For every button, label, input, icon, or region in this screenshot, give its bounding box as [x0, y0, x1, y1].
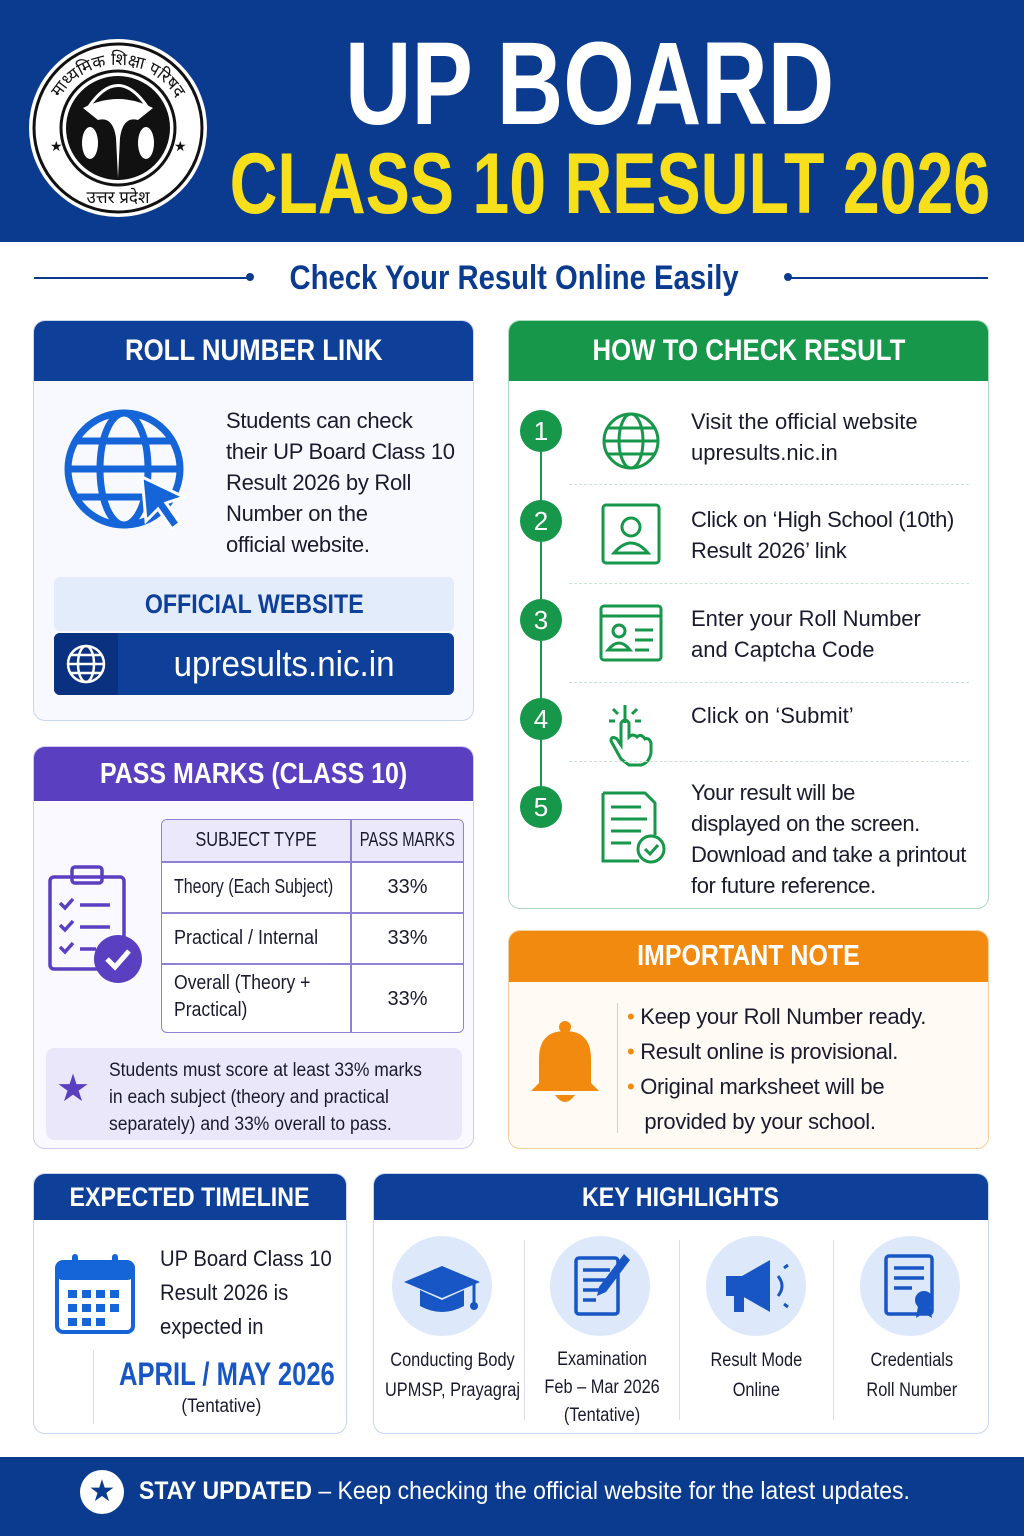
step 3: 3: [534, 605, 548, 635]
highlight: result mode: Online: [733, 1380, 780, 1401]
note list: • Result online is provisional.: [627, 1039, 898, 1064]
step 4: Click on ‘Submit’: [691, 703, 854, 728]
step 1: 1: [534, 416, 548, 446]
tagline: [34, 259, 988, 297]
table: [161, 819, 464, 1033]
icon: calendar: [55, 1254, 135, 1334]
logo: ★: [50, 138, 63, 154]
icon: checklist: [48, 865, 142, 983]
highlight: credentials: [860, 1236, 960, 1401]
step 1: [520, 409, 918, 470]
table: Practical / Internal: [174, 927, 318, 949]
title: UP BOARD: [345, 18, 835, 150]
text: timeline: UP Board Class 10: [160, 1246, 332, 1271]
url bar: [54, 633, 454, 695]
callout: note: in each subject (theory and practical: [109, 1087, 389, 1108]
label: official website: OFFICIAL WEBSITE: [145, 589, 363, 619]
panel: expected timeline: (Tentative): [181, 1396, 261, 1417]
panel: expected timeline: [33, 1173, 347, 1434]
text: description: [226, 408, 455, 557]
step 5: 5: [534, 792, 548, 822]
highlight: examination: (Tentative): [564, 1405, 641, 1426]
text: description: their UP Board Class 10: [226, 439, 455, 464]
logo: [29, 39, 207, 217]
note list: [627, 1004, 926, 1134]
panel: how to check: [508, 320, 989, 909]
logo: उत्तर प्रदेश: [86, 187, 150, 207]
note list: • Original marksheet will be: [627, 1074, 884, 1099]
panel: pass marks: [33, 746, 474, 1149]
table: 33%: [387, 988, 428, 1010]
step 3: Enter your Roll Number: [691, 606, 921, 631]
panel: roll number link: ROLL NUMBER LINK: [125, 334, 382, 367]
highlight: examination: Feb – Mar 2026: [545, 1377, 660, 1398]
panel: how to check: HOW TO CHECK RESULT: [592, 334, 905, 367]
panel: pass marks: PASS MARKS (CLASS 10): [100, 758, 407, 790]
text: timeline: expected in: [160, 1314, 264, 1339]
subtitle title: CLASS 10 RESULT 2026: [230, 136, 990, 232]
table: Overall (Theory +: [174, 972, 310, 994]
step 5: Your result will be: [691, 780, 855, 805]
step 1: upresults.nic.in: [691, 440, 838, 465]
callout: note: Students must score at least 33% marks: [109, 1060, 422, 1081]
step 3: and Captcha Code: [691, 637, 874, 662]
panel: important note: IMPORTANT NOTE: [637, 940, 860, 972]
logo: ★: [174, 138, 187, 154]
highlight: examination: [545, 1236, 660, 1426]
step 2: 2: [534, 506, 548, 536]
callout: note: [46, 1048, 462, 1140]
highlight: credentials: Credentials: [871, 1350, 953, 1371]
header banner: [0, 0, 1024, 242]
step 1: Visit the official website: [691, 409, 918, 434]
step 5: [520, 780, 966, 898]
icon: star badge: [80, 1470, 124, 1514]
footer text: STAY UPDATED – Keep checking the official website for the latest updates.: [139, 1477, 910, 1505]
panel: key highlights: [373, 1173, 989, 1434]
step 2: Click on ‘High School (10th): [691, 507, 954, 532]
table: 33%: [387, 927, 428, 949]
step 5: displayed on the screen.: [691, 811, 920, 836]
panel: key highlights: KEY HIGHLIGHTS: [583, 1182, 779, 1212]
table: Theory (Each Subject): [174, 876, 333, 898]
highlight: conducting body: [385, 1236, 520, 1401]
table: SUBJECT TYPE: [195, 829, 317, 851]
text: description: Students can check: [226, 408, 413, 433]
date: APRIL / MAY 2026: [119, 1356, 335, 1392]
note list: • Keep your Roll Number ready.: [627, 1004, 926, 1029]
callout: note: ★: [56, 1068, 90, 1110]
highlight: conducting body: UPMSP, Prayagraj: [385, 1380, 520, 1401]
text: timeline: Result 2026 is: [160, 1280, 288, 1305]
tagline: Check Your Result Online Easily: [289, 259, 739, 297]
step 5: for future reference.: [691, 873, 876, 898]
label: official website: [54, 577, 454, 631]
highlight: examination: Examination: [558, 1349, 647, 1370]
footer: [0, 1457, 1024, 1536]
text: timeline: [160, 1246, 332, 1339]
callout: note: separately) and 33% overall to pass.: [109, 1114, 392, 1135]
url bar: upresults.nic.in: [174, 643, 394, 684]
panel: expected timeline: EXPECTED TIMELINE: [70, 1182, 310, 1212]
text: description: official website.: [226, 532, 370, 557]
table: Practical): [174, 999, 247, 1021]
step 5: Download and take a printout: [691, 842, 966, 867]
panel: important note: [508, 930, 989, 1149]
step 4: 4: [534, 704, 548, 734]
text: description: Number on the: [226, 501, 368, 526]
logo: माध्यमिक शिक्षा परिषद: [50, 50, 186, 98]
step 2: [520, 500, 954, 564]
panel: roll number link: [33, 320, 474, 721]
step 3: [520, 599, 921, 662]
highlight: conducting body: Conducting Body: [390, 1350, 515, 1371]
highlight: credentials: Roll Number: [867, 1380, 957, 1401]
table: PASS MARKS: [359, 829, 455, 851]
icon: star badge: ★: [89, 1475, 115, 1508]
icon: globe cursor: [64, 410, 184, 528]
table: 33%: [387, 876, 428, 898]
highlight: result mode: [706, 1236, 806, 1401]
step 4: [520, 698, 854, 766]
highlight: result mode: Result Mode: [711, 1350, 802, 1371]
note list: provided by your school.: [644, 1109, 876, 1134]
step 2: Result 2026’ link: [691, 538, 847, 563]
icon: bell: [531, 1021, 599, 1102]
text: description: Result 2026 by Roll: [226, 470, 411, 495]
